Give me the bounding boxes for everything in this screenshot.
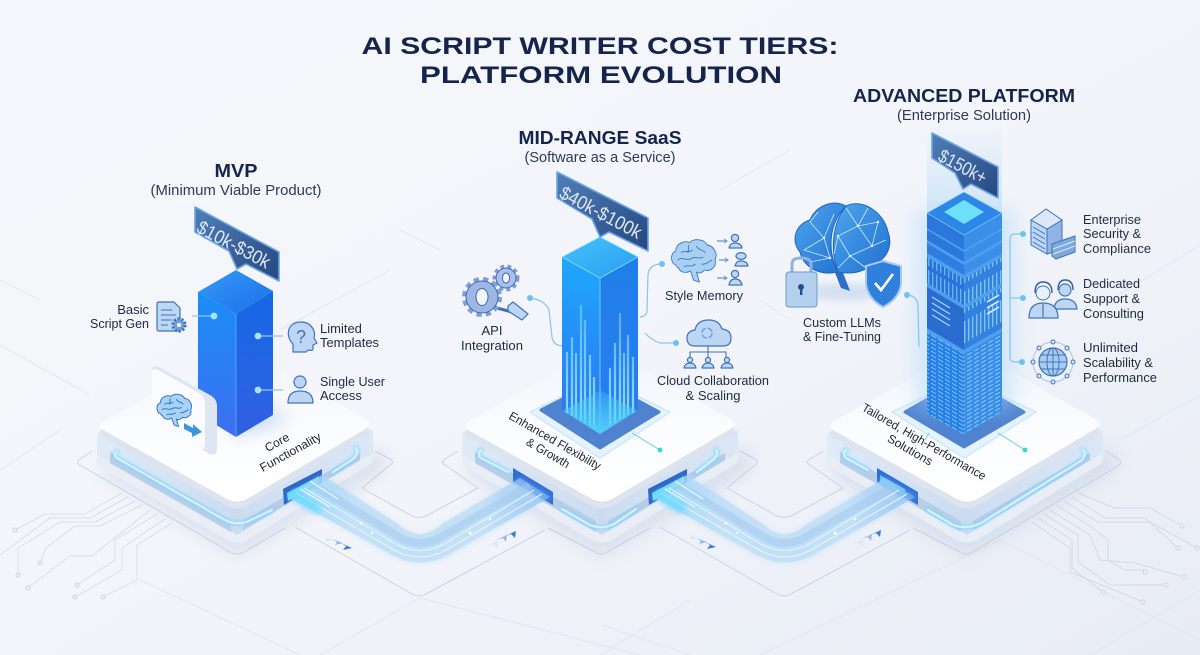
callout: enterprise security: Enterprise <box>1083 212 1141 227</box>
icon: user <box>288 376 313 403</box>
callout: single user access: Access <box>320 388 362 403</box>
callout: single user access <box>255 374 386 403</box>
callout: dedicated support: Dedicated <box>1083 276 1140 291</box>
bracket connector <box>1010 231 1026 365</box>
heading: MVP <box>150 161 322 199</box>
light beam <box>927 120 1002 220</box>
icon: cloud network <box>684 320 733 368</box>
arrow: data tube SaaS to Advanced <box>651 475 917 563</box>
chart layer <box>927 257 1002 305</box>
heading: Mid-Range SaaS: (Software as a Service) <box>524 150 676 166</box>
icon: shield check <box>866 261 901 307</box>
callout: custom LLMs: Custom LLMs <box>803 315 881 330</box>
callout: dedicated support <box>1029 276 1144 321</box>
callout: cloud collaboration: Cloud Collaboration <box>657 373 769 388</box>
callout: cloud collaboration: & Scaling <box>686 388 740 403</box>
base plate <box>541 380 659 448</box>
arrow: data tube MVP to SaaS <box>286 475 552 563</box>
callout: custom LLMs: & Fine-Tuning <box>803 329 881 344</box>
icon: brain with users <box>672 234 748 285</box>
icon: head question: ? <box>296 327 306 347</box>
platform label: Enhanced Flexibility <box>506 409 604 473</box>
background grid lines <box>0 150 1200 655</box>
price tag: $150k+ <box>934 146 990 189</box>
heading: MVP: (Minimum Viable Product) <box>150 183 322 199</box>
callout: API integration: Integration <box>461 338 523 353</box>
callout: limited templates <box>255 321 379 352</box>
callout: enterprise security: Compliance <box>1083 241 1151 256</box>
layered tower <box>927 192 1002 435</box>
heading: Advanced Platform <box>853 86 1075 124</box>
price tag <box>932 133 998 198</box>
arrow: chevrons <box>323 531 516 550</box>
circuit traces right <box>1032 493 1199 604</box>
heading: MVP: MVP <box>214 161 258 181</box>
callout: limited templates: Templates <box>320 335 379 350</box>
icon: network brain <box>795 203 890 301</box>
callout: limited templates: Limited <box>320 321 362 336</box>
callout: enterprise security <box>1031 209 1151 259</box>
icon: support agents <box>1029 280 1077 318</box>
callout: unlimited scalability <box>1031 340 1157 385</box>
title: AI SCRIPT WRITER COST TIERS: <box>362 33 838 60</box>
glass bar <box>562 237 638 434</box>
arrow: chevrons <box>687 530 881 549</box>
callout: unlimited scalability: Performance <box>1083 370 1157 385</box>
callout: custom LLMs <box>786 203 919 347</box>
platform label: Solutions <box>885 431 935 468</box>
bar shadow <box>198 380 290 436</box>
glow ring <box>530 378 670 458</box>
callout: dedicated support: Support & <box>1083 291 1140 306</box>
callout: cloud collaboration <box>645 320 769 403</box>
connector ports <box>513 468 687 505</box>
platform label: Core <box>262 430 292 455</box>
platform label: Tailored, High-Performance <box>859 400 989 483</box>
heading: Mid-Range SaaS <box>518 128 682 166</box>
icon: document gear <box>157 302 185 331</box>
price tag: $40k-$100k <box>556 183 645 244</box>
platform label <box>250 416 324 475</box>
icon: globe <box>1031 340 1075 384</box>
platform label: & Growth <box>524 435 572 471</box>
floor outline traces <box>78 451 1120 596</box>
callout: style memory: Style Memory <box>665 288 743 303</box>
heading: Advanced Platform: ADVANCED PLATFORM <box>853 86 1075 106</box>
heading: Advanced Platform: (Enterprise Solution) <box>897 108 1031 124</box>
heading: Mid-Range SaaS: MID-RANGE SaaS <box>518 128 682 148</box>
connector port <box>877 468 918 505</box>
callout: enterprise security: Security & <box>1083 226 1141 241</box>
title <box>362 33 838 89</box>
panel: platform Mid-Range SaaS <box>461 128 769 556</box>
slab layers <box>927 192 1002 275</box>
title: PLATFORM EVOLUTION <box>420 62 782 89</box>
base layer <box>927 332 1002 435</box>
callout: style memory <box>640 234 748 317</box>
callout: basic script gen: Basic <box>117 302 149 317</box>
icon: padlock <box>786 258 817 307</box>
tower glow <box>915 210 1015 410</box>
callout: dedicated support: Consulting <box>1083 306 1144 321</box>
icon: server and firewall <box>1031 209 1075 259</box>
callout: API integration: API <box>482 323 502 338</box>
circuit traces left <box>0 493 172 599</box>
price tag: $10k-$30k <box>193 217 274 274</box>
icon: gears and plug <box>465 267 528 320</box>
panel: platform MVP <box>90 161 386 556</box>
callout: basic script gen <box>90 302 217 331</box>
connector port <box>283 469 322 505</box>
price bar <box>198 270 273 437</box>
callout: single user access: Single User <box>320 374 386 389</box>
callout: unlimited scalability: Unlimited <box>1083 340 1138 355</box>
bar data lines <box>567 305 633 429</box>
icon: brain with arrow <box>157 394 202 437</box>
brain card <box>152 366 217 455</box>
base plate <box>905 378 1024 447</box>
callout: basic script gen: Script Gen <box>90 316 149 331</box>
data layer <box>927 287 1002 350</box>
panel: platform Advanced <box>786 86 1157 556</box>
glow ring <box>892 378 1036 458</box>
callout: API integration <box>461 267 562 353</box>
callout: unlimited scalability: Scalability & <box>1083 355 1153 370</box>
platform label: Functionality <box>257 430 324 475</box>
